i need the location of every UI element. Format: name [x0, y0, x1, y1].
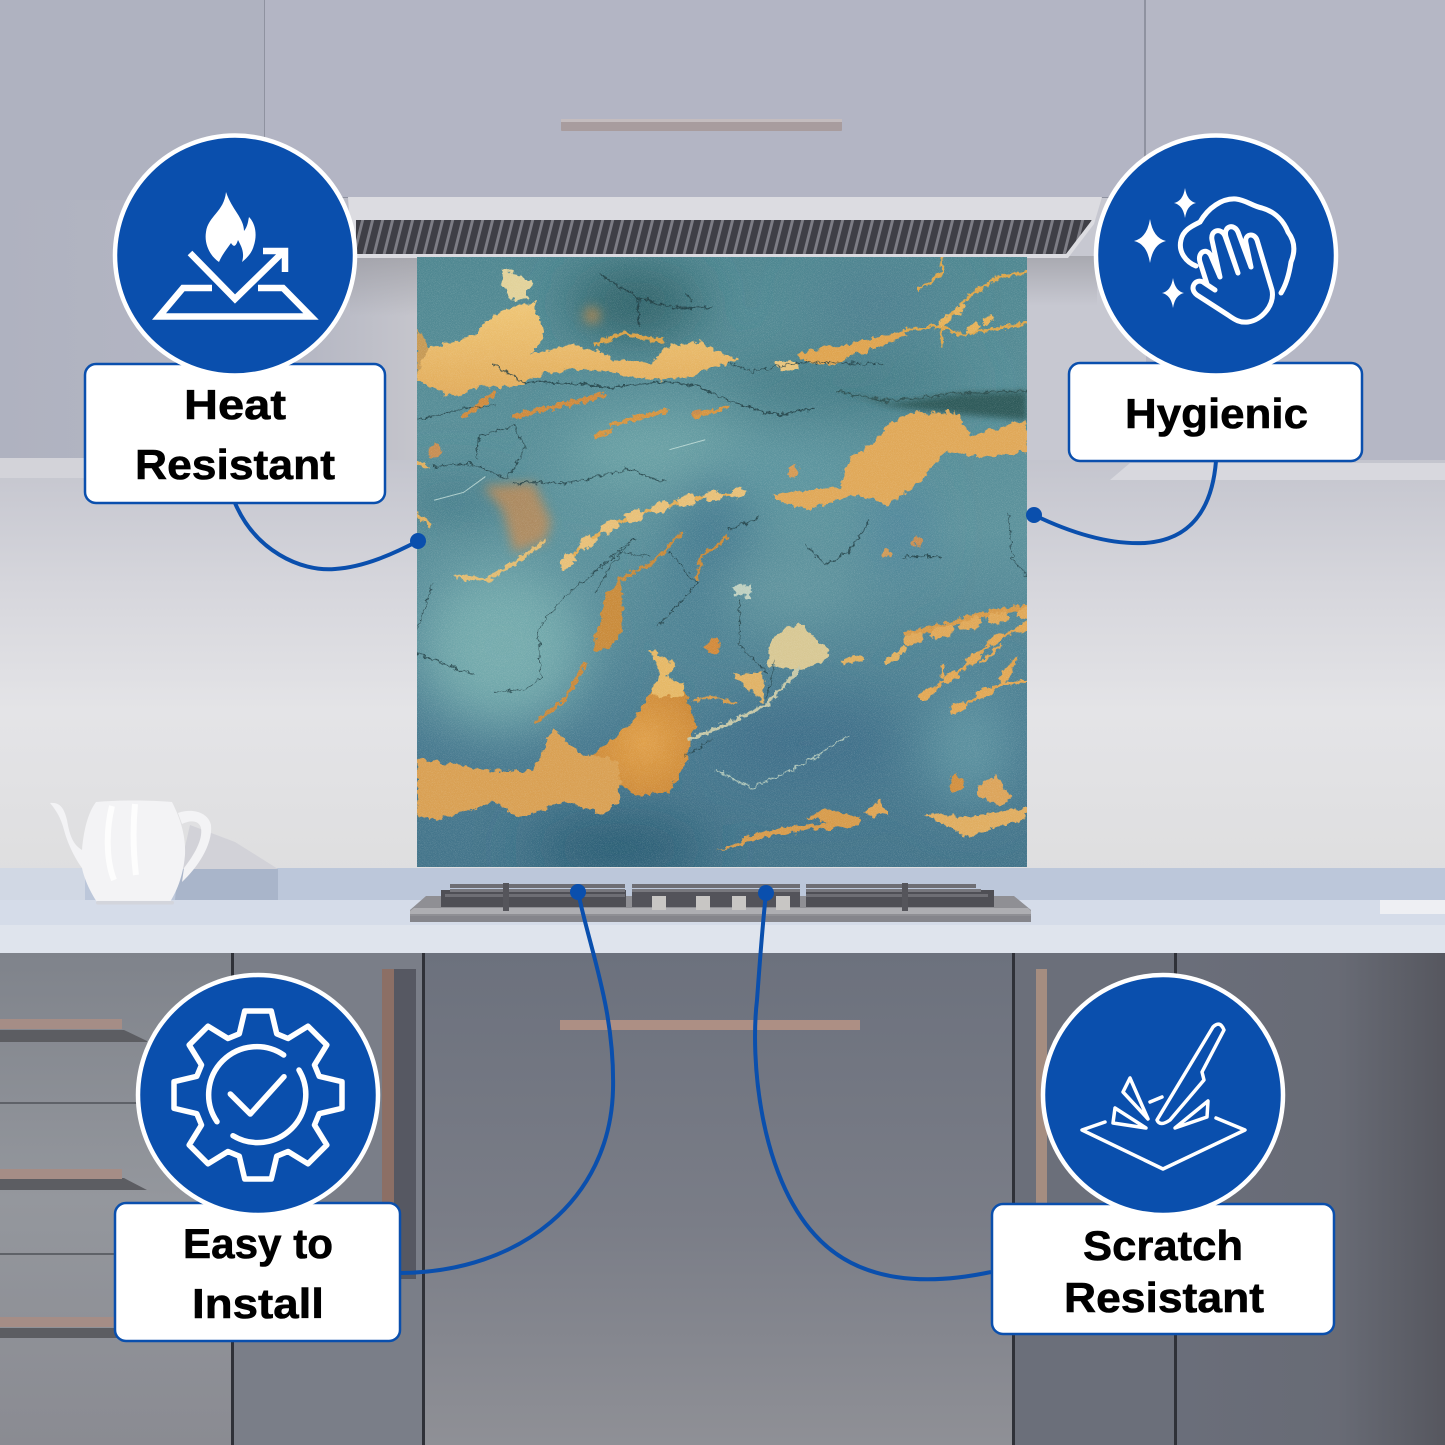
upper cabinet row [0, 0, 1445, 198]
connector: easy to install [401, 884, 613, 1273]
label text second line: Install [192, 1280, 324, 1327]
fine mineral grain [417, 257, 1027, 867]
white corner detail [1380, 900, 1445, 914]
label text: Scratch [1083, 1222, 1243, 1269]
gas hob [410, 883, 1031, 922]
hood shadow right [1027, 256, 1097, 306]
upper right cabinet [1146, 0, 1445, 460]
icon: flame over surface with deflected arrow [159, 192, 311, 316]
teapot shadow on splash strip [175, 869, 278, 900]
gold veins [417, 269, 1027, 852]
icon: hand wiping with sparkles [1134, 188, 1294, 322]
feature: scratch resistant [992, 975, 1334, 1334]
badge [1043, 975, 1283, 1215]
gold thin veins [417, 257, 1027, 788]
base cabinets [0, 953, 1445, 1445]
dark cracks [417, 275, 1027, 757]
marble tonal clouds [386, 273, 1012, 876]
upper cabinet handle [561, 119, 842, 131]
upper wall and left tall cabinet [0, 190, 417, 460]
connector: heat resistant [235, 503, 426, 569]
connector: scratch resistant [755, 885, 991, 1279]
label box [1069, 363, 1362, 461]
feature: heat resistant [85, 136, 385, 503]
countertop edge [0, 925, 1445, 953]
orange haze [483, 307, 601, 553]
upper left cabinet [0, 0, 264, 200]
white teapot [50, 800, 211, 904]
splash counter back strip [0, 868, 1445, 901]
upper left cabinet underside [0, 458, 84, 478]
label box [992, 1204, 1334, 1334]
label text second line: Resistant [135, 441, 335, 488]
connector: hygienic [1026, 461, 1216, 543]
countertop [0, 900, 1445, 926]
icon: gear with check mark [174, 1011, 342, 1179]
marble splashback panel [386, 257, 1027, 876]
label text: Hygienic [1125, 390, 1308, 437]
pale highlights [435, 440, 705, 500]
marble base [417, 257, 1027, 867]
lower wall [0, 460, 1445, 880]
feature: hygienic [1069, 136, 1362, 461]
label box [85, 364, 385, 503]
label box [115, 1203, 400, 1341]
drawer handles [0, 969, 1047, 1338]
label text second line: Resistant [1064, 1274, 1264, 1321]
range hood [348, 197, 1102, 258]
hood shadow left [350, 256, 418, 316]
badge [138, 975, 378, 1215]
teapot shadow on wall [180, 825, 278, 869]
badge [1096, 136, 1336, 376]
label text: Easy to [183, 1220, 333, 1267]
upper centre cabinet [265, 0, 1144, 197]
icon: knife scratching surface [1082, 1024, 1245, 1169]
upper right cabinet underside [1110, 463, 1445, 480]
label text: Heat [184, 381, 286, 428]
grates [441, 890, 626, 907]
feature: easy to install [115, 975, 400, 1341]
badge [115, 136, 355, 376]
soft dark vein band [841, 391, 1027, 420]
upper right wall [1027, 190, 1157, 470]
